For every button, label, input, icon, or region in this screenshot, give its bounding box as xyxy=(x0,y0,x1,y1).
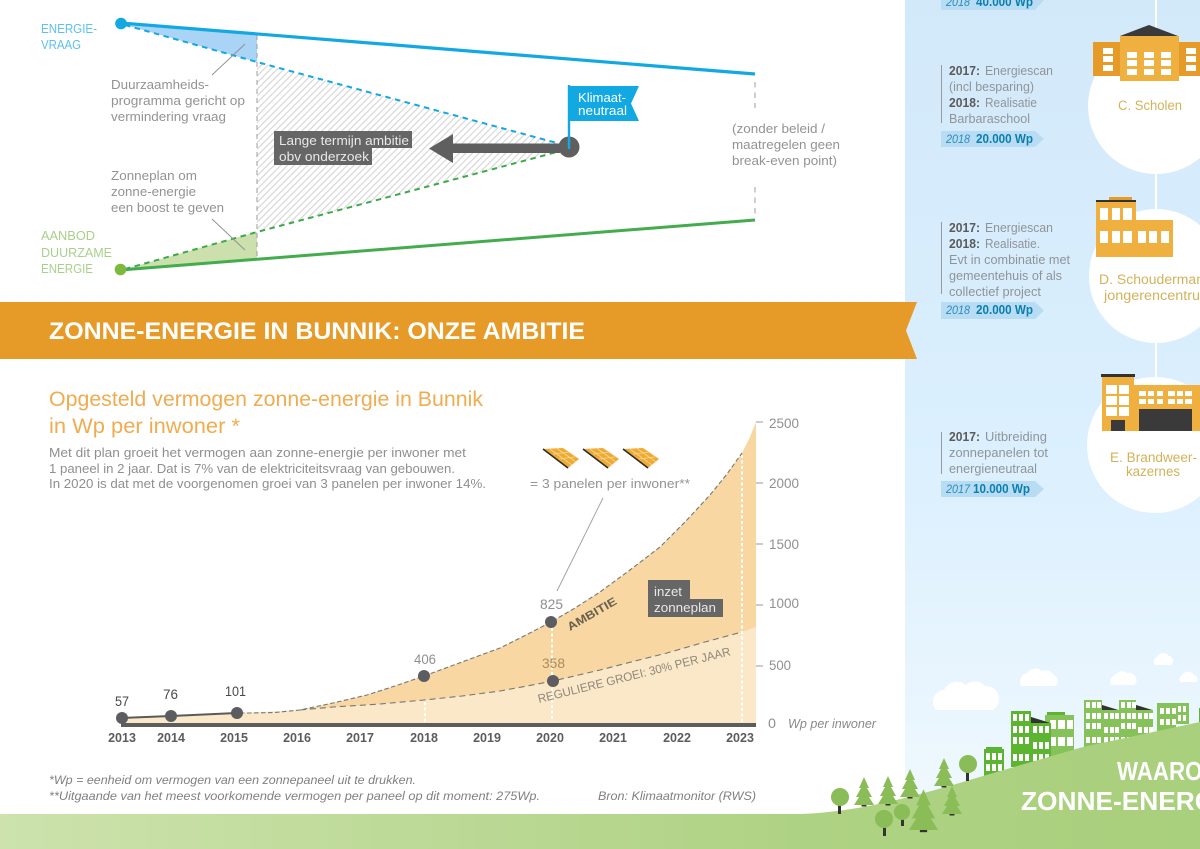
text: school plan: Energiescan xyxy=(985,63,1053,78)
text: youth centre plan xyxy=(941,220,1070,299)
chart: installed solar capacity per resident xyxy=(108,415,877,745)
data dots xyxy=(116,616,559,724)
tag: 2018 20.000 Wp: 2018 xyxy=(945,303,970,317)
year labels: 2018 xyxy=(410,731,438,745)
year labels: 2020 xyxy=(536,731,564,745)
curve label: reguliere groei: REGULIERE GROEI: 30% PER JAAR xyxy=(536,644,732,706)
y axis ticks and labels: 500 xyxy=(769,657,791,673)
year labels: 2022 xyxy=(663,731,691,745)
clouds xyxy=(933,653,1197,710)
icons: three solar panels xyxy=(543,448,659,468)
label: aanbod duurzame energie: DUURZAME xyxy=(41,245,112,260)
blue reduced demand wedge xyxy=(125,25,257,62)
text: fire station plan: 2017: xyxy=(949,429,980,444)
banner: section heading xyxy=(0,302,917,359)
panel: sky background right column xyxy=(905,0,1200,800)
circle: D. Schouderman jongerencentrum xyxy=(1089,197,1200,343)
leader lines xyxy=(212,44,245,250)
text: youth centre plan: 2017: xyxy=(949,220,980,235)
year labels: 2015 xyxy=(220,731,248,745)
value labels: 57 xyxy=(115,694,129,709)
icon: youth centre building xyxy=(1096,197,1173,257)
label: duurzaamheidsprogramma: vermindering vraag xyxy=(111,109,226,124)
banner: section heading: ZONNE-ENERGIE IN BUNNIK: ONZE AMBITIE xyxy=(49,318,585,345)
label: aanbod duurzame energie: AANBOD xyxy=(41,228,95,243)
tag: 2017 10.000 Wp: 10.000 Wp xyxy=(973,482,1030,496)
year labels: 2019 xyxy=(473,731,501,745)
y axis ticks and labels xyxy=(756,415,877,731)
heading: opgesteld vermogen: Opgesteld vermogen zonne-energie in Bunnik xyxy=(49,388,483,411)
year labels: 2016 xyxy=(283,731,311,745)
timeline line xyxy=(1155,0,1157,390)
circle: C. Scholen xyxy=(1088,25,1200,174)
large pine xyxy=(909,789,938,832)
year labels: 2013 xyxy=(108,731,136,745)
year labels xyxy=(108,731,754,745)
heading: opgesteld vermogen: in Wp per inwoner * xyxy=(49,415,240,438)
value labels xyxy=(115,597,565,709)
icon: school xyxy=(1093,25,1200,81)
text block: introduction: Met dit plan groeit het vermogen aan zonne-energie per inwoner met xyxy=(49,446,467,460)
leader line xyxy=(557,498,603,591)
value labels: 101 xyxy=(225,684,246,699)
dashed blue ambition line xyxy=(125,25,557,143)
illustration: trees xyxy=(831,755,977,836)
label: aanbod duurzame energie: ENERGIE xyxy=(41,261,93,276)
label box: lange termijn ambitie xyxy=(274,131,412,165)
solid green supply line xyxy=(121,220,755,270)
y axis ticks and labels: 2500 xyxy=(769,415,799,431)
text: youth centre plan: Energiescan xyxy=(985,220,1053,235)
flag: klimaatneutraal xyxy=(568,85,639,149)
y axis ticks and labels: Wp per inwoner xyxy=(788,716,877,731)
name: E. Brandweer- xyxy=(1110,450,1197,465)
label box: lange termijn ambitie: Lange termijn ambitie xyxy=(279,133,409,148)
text block: introduction: 1 paneel in 2 jaar. Dat is 7% van de elektriciteitsvraag van gebouwen. xyxy=(49,462,455,476)
label box: lange termijn ambitie: obv onderzoek xyxy=(279,149,370,164)
year labels: 2017 xyxy=(346,731,374,745)
flag: klimaatneutraal: neutraal xyxy=(578,103,627,118)
curve label: ambitie: AMBITIE xyxy=(566,596,619,634)
dashed green ambition line xyxy=(125,152,557,269)
label: duurzaamheidsprogramma: Duurzaamheids- xyxy=(111,77,209,92)
tag: 2017 10.000 Wp: 2017 xyxy=(945,482,971,496)
label: zonneplan: een boost te geven xyxy=(111,200,224,215)
text: school plan: (incl besparing) xyxy=(949,79,1034,94)
year labels: 2023 xyxy=(726,731,754,745)
footnotes: **Uitgaande van het meest voorkomende vermogen per paneel op dit moment: 275Wp. xyxy=(49,789,540,803)
tag: 2018 20.000 Wp: 20.000 Wp xyxy=(976,303,1033,317)
dashed line: regular growth xyxy=(300,632,742,710)
icon: fire station xyxy=(1101,374,1200,431)
round tree xyxy=(894,804,910,826)
text: fire station plan: Uitbreiding xyxy=(985,429,1047,444)
round tree xyxy=(875,810,893,836)
text: school plan xyxy=(941,63,1053,126)
value labels: 406 xyxy=(414,652,436,667)
text: youth centre plan: gemeentehuis of als xyxy=(949,268,1062,283)
label: 3 panelen per inwoner: = 3 panelen per inwoner** xyxy=(530,476,690,491)
value labels: 358 xyxy=(542,656,565,671)
tag: 2018 20.000 Wp xyxy=(941,131,1044,147)
green start dot xyxy=(115,264,126,275)
name: kazernes xyxy=(1126,464,1180,479)
text: youth centre plan: 2018: xyxy=(949,236,980,251)
solid blue demand line xyxy=(121,23,755,74)
text: youth centre plan: collectief project xyxy=(949,284,1041,299)
tag: 2018 20.000 Wp: 20.000 Wp xyxy=(976,132,1033,146)
footnotes: *Wp = eenheid om vermogen van een zonnepaneel uit te drukken. xyxy=(49,773,416,787)
text: school plan: 2017: xyxy=(949,63,980,78)
label: zonneplan: Zonneplan om xyxy=(111,168,197,183)
round tree xyxy=(959,755,977,781)
y axis ticks and labels: 1000 xyxy=(769,595,799,611)
label: duurzaamheidsprogramma: programma gericht op xyxy=(111,93,245,108)
label box: inzet zonneplan: inzet xyxy=(654,584,682,599)
dashed line: ambition xyxy=(240,453,742,713)
tag: 2017 10.000 Wp xyxy=(941,481,1044,497)
illustration: green buildings xyxy=(984,700,1200,777)
rear trees xyxy=(854,758,962,816)
green solar plan wedge xyxy=(125,232,257,269)
label box: inzet zonneplan: zonneplan xyxy=(654,600,716,615)
circle: E. Brandweerkazernes xyxy=(1087,374,1200,513)
tag: 2018 20.000 Wp xyxy=(941,302,1044,319)
text: fire station plan: energieneutraal xyxy=(949,461,1037,476)
round tree xyxy=(831,788,849,814)
chart: energy demand and supply gap xyxy=(41,18,840,276)
text: fire station plan: zonnepanelen tot xyxy=(949,445,1048,460)
year labels: 2021 xyxy=(599,731,627,745)
hill and bottom band xyxy=(0,722,1200,849)
text: youth centre plan: Evt in combinatie met xyxy=(949,252,1070,267)
label: zonder beleid: break-even point) xyxy=(732,153,837,168)
value labels: 825 xyxy=(540,597,563,612)
value labels: 76 xyxy=(163,687,178,702)
area: ambition xyxy=(237,422,756,725)
y axis ticks and labels: 1500 xyxy=(769,536,799,552)
text: fire station plan xyxy=(941,429,1048,476)
name: D. Schouderman xyxy=(1099,272,1200,287)
tag: 2018 20.000 Wp: 2018 xyxy=(945,132,970,146)
blue start dot xyxy=(115,18,127,29)
x axis xyxy=(121,723,756,727)
text: youth centre plan: Realisatie. xyxy=(985,236,1040,251)
source: Bron: Klimaatmonitor (RWS) xyxy=(598,789,756,803)
text: school plan: Barbaraschool xyxy=(949,111,1030,126)
label: zonneplan: zonne-energie xyxy=(111,184,196,199)
label: zonder beleid: (zonder beleid / xyxy=(732,121,825,136)
flag: klimaatneutraal: Klimaat- xyxy=(578,90,626,105)
label box: inzet zonneplan xyxy=(648,580,723,617)
climate neutral point xyxy=(558,136,580,158)
item: previous project amount xyxy=(941,0,1044,10)
name: C. Scholen xyxy=(1118,98,1182,113)
label: zonder beleid: maatregelen geen xyxy=(732,137,840,152)
label: energievraag: VRAAG xyxy=(41,37,81,52)
label: energievraag: ENERGIE- xyxy=(41,21,97,36)
year labels: 2014 xyxy=(157,731,185,745)
area: regular growth xyxy=(122,627,756,725)
white year guides xyxy=(425,455,742,722)
text: school plan: Realisatie xyxy=(985,95,1037,110)
y axis ticks and labels: 0 xyxy=(768,715,776,731)
hatched ambition area xyxy=(257,62,557,232)
arrow: towards long-term ambition xyxy=(429,134,560,163)
historic line xyxy=(122,713,237,718)
text block: introduction: In 2020 is dat met de voorgenomen groei van 3 panelen per inwoner 14%. xyxy=(49,477,486,491)
text: school plan: 2018: xyxy=(949,95,980,110)
y axis ticks and labels: 2000 xyxy=(769,475,799,491)
